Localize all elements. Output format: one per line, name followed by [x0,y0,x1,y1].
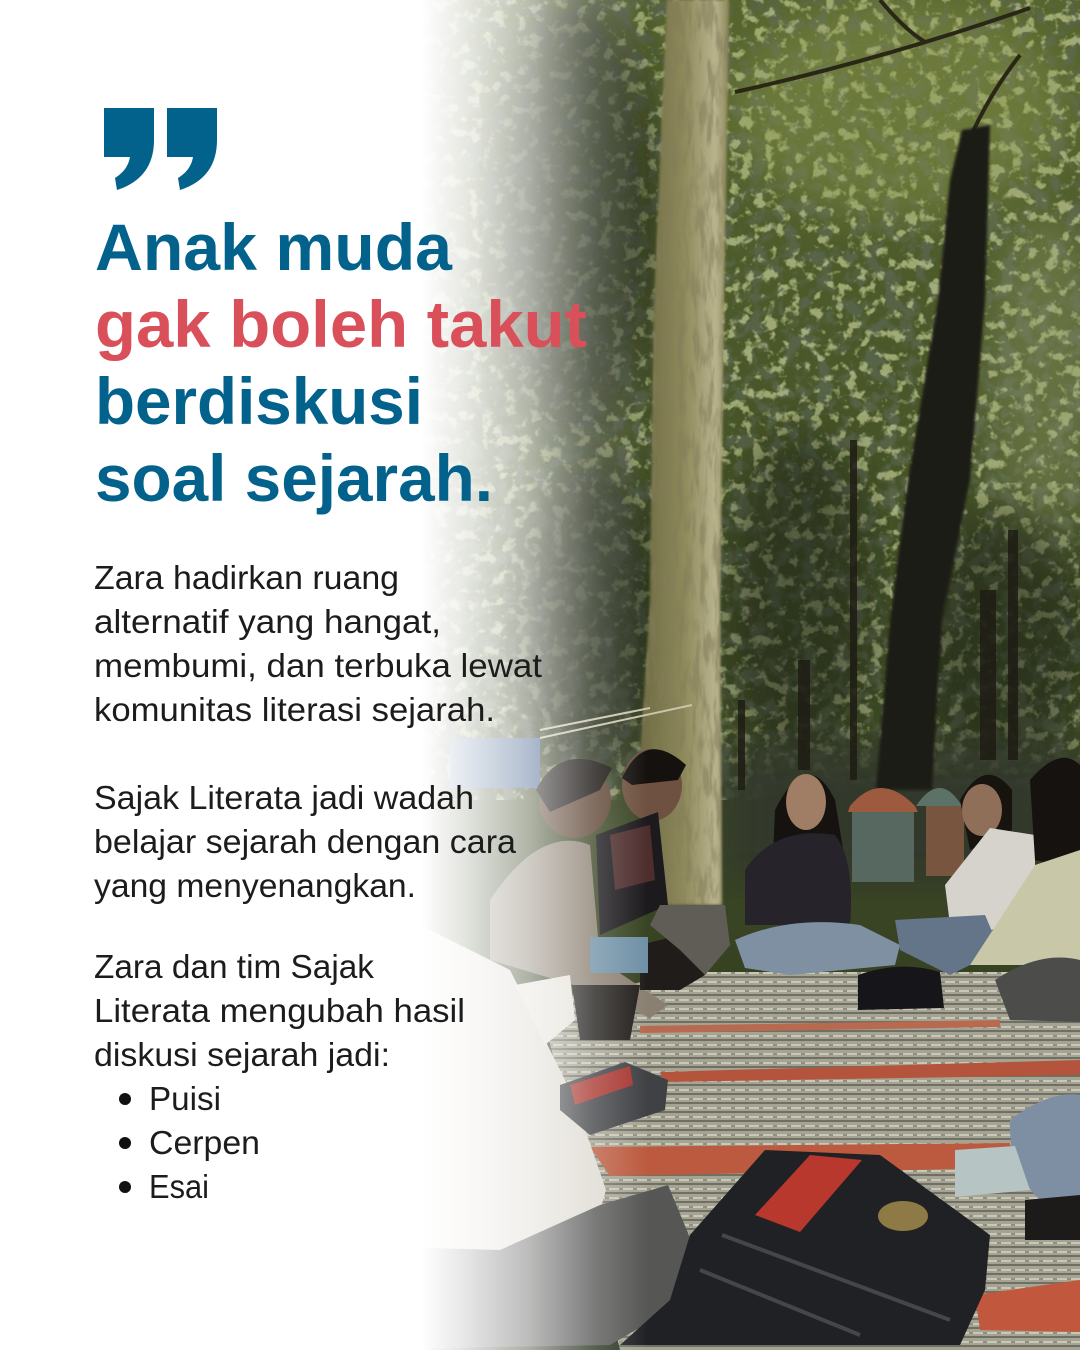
text block: first paragraph: Zara hadirkan ruang [94,559,399,596]
bullet list: literary forms: Esai [149,1168,209,1205]
text block: second paragraph: yang menyenangkan. [94,867,416,904]
text block: third paragraph: diskusi sejarah jadi: [94,1036,390,1073]
text block: second paragraph: Sajak Literata jadi wadah [94,779,474,816]
rope and banner [450,705,692,788]
people on the right [895,758,1080,1240]
text block: first paragraph: membumi, dan terbuka lewat [94,647,542,684]
mat [540,972,1080,1350]
main tree trunk [640,0,730,905]
text block: second paragraph [94,779,517,904]
person: boy in striped shirt [490,759,705,1040]
rubbish bins [848,788,964,882]
bullet list: literary forms: Cerpen [149,1124,260,1161]
background photo: discussion under the trees [432,0,1080,1350]
title: gak boleh takut [95,287,587,361]
text block: first paragraph: alternatif yang hangat, [94,603,441,640]
text block: first paragraph: komunitas literasi sejarah. [94,691,495,728]
thin background trunks [738,440,1018,790]
title [95,210,587,515]
title: berdiskusi [95,364,423,438]
book on mat [955,1146,1030,1197]
bullet list: literary forms [119,1080,260,1205]
text block: third paragraph: Literata mengubah hasil [94,992,465,1029]
title: soal sejarah. [95,441,493,515]
person: girl speaking [735,774,900,975]
text block: third paragraph: Zara dan tim Sajak [94,948,374,985]
icon: quotation mark [104,108,217,190]
bullet list: literary forms: Puisi [149,1080,221,1117]
branches [735,0,1030,150]
distant ground band [722,745,1080,885]
text block: second paragraph: belajar sejarah dengan cara [94,823,517,860]
text block: first paragraph [94,559,542,728]
dark tree trunk [876,125,990,790]
person: boy in batik shirt [590,749,730,975]
foreground person in white shirt [330,880,693,1350]
foliage [330,0,1080,800]
backpack in foreground [620,1150,990,1345]
text block: third paragraph [94,948,465,1073]
black bag on mat [858,967,944,1010]
title: Anak muda [95,210,453,284]
